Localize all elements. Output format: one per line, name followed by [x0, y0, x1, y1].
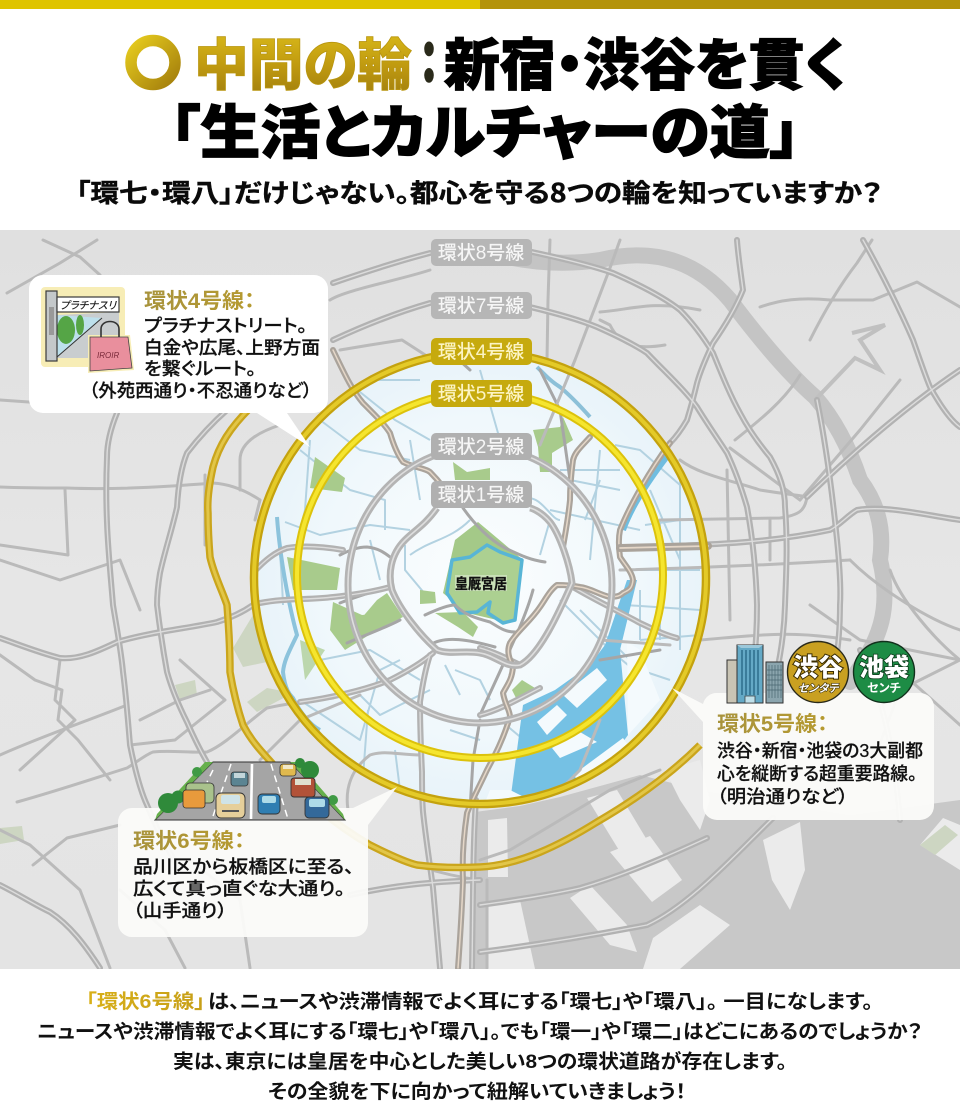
- description: [717, 741, 923, 807]
- title gold part: 中間の輪: [194, 21, 412, 102]
- label: ring 8: [431, 239, 532, 266]
- top colour bar: [0, 0, 960, 9]
- heading: 環状5号線：: [717, 713, 828, 736]
- outer faded parks: [0, 615, 958, 855]
- description: （外苑西通り・不忍通りなど）: [89, 381, 312, 401]
- bottom intro text: ニュースや渋滞情報でよく耳にする「環七」や「環八」。でも「環一」や「環二」はどこにあるのでしょうか？: [37, 1021, 922, 1043]
- car: blue: [258, 794, 280, 814]
- icon: Shibuya badge: 渋谷: [793, 654, 843, 682]
- label: ring 2: [431, 433, 532, 460]
- car: tan: [216, 793, 245, 818]
- icon: road with cars: [155, 758, 345, 820]
- white piers in bay: [486, 656, 660, 800]
- callout: ring 5: [672, 642, 934, 820]
- icon: Ikebukuro badge: センチ: [867, 681, 901, 695]
- label: imperial palace: 皇厩宮居: [455, 576, 507, 593]
- car: orange: [183, 783, 214, 808]
- icon: Ikebukuro badge: 池袋: [859, 654, 909, 682]
- title line one: 新宿・渋谷を貫く: [444, 21, 846, 102]
- water: gray river: [480, 250, 885, 682]
- car: gray teal: [231, 772, 248, 786]
- title line two: 「生活とカルチャーの道」: [170, 86, 800, 170]
- icon: platinum street sign and bag: IROIR: [97, 351, 119, 360]
- ring road 1: [390, 508, 572, 665]
- icon: platinum street sign and bag: [41, 287, 134, 373]
- description: 心を縦断する超重要路線。: [717, 764, 917, 784]
- label: ring 1: 環状1号線: [438, 484, 524, 506]
- callout 5 box and tail: [672, 688, 934, 820]
- icon: Shibuya badge: センタテ: [798, 682, 840, 695]
- bottom intro text: その全貌を下に向かって紐解いていきましょう！: [268, 1081, 686, 1103]
- subtitle: 「環七・環八」だけじゃない。都心を守る8つの輪を知っていますか？: [76, 173, 882, 210]
- car: gold: [280, 764, 296, 776]
- icon: office buildings: [727, 645, 783, 703]
- label: ring 8: 環状8号線: [438, 242, 524, 264]
- map panel: [0, 230, 960, 969]
- car: navy: [305, 797, 329, 818]
- label: ring 5: [431, 380, 532, 407]
- title colon: ：: [420, 19, 438, 100]
- heading: 環状4号線：: [144, 290, 255, 313]
- inner detail: [277, 350, 700, 830]
- central light blue zone: [254, 352, 706, 804]
- description: 品川区から板橋区に至る、: [133, 857, 354, 877]
- icon: gold ring: [131, 40, 175, 84]
- car: red: [291, 778, 315, 797]
- parks: [287, 417, 573, 700]
- icon: Shibuya badge: [788, 642, 848, 702]
- ring road 2: [348, 447, 612, 723]
- ring road 5 yellow: [297, 392, 663, 758]
- description: 白金や広尾、上野方面: [144, 338, 320, 358]
- palace moat: [447, 545, 522, 623]
- label: ring 7: [431, 292, 532, 319]
- ring road 6 gold: [208, 408, 700, 868]
- description: を繋ぐルート。: [144, 359, 256, 379]
- description: （山手通り）: [133, 901, 227, 921]
- icon: Ikebukuro badge: [854, 642, 914, 702]
- description: （明治通りなど）: [717, 787, 848, 807]
- water: gray bay: [470, 775, 960, 969]
- bottom intro text: 実は、東京には皇居を中心とした美しい8つの環状道路が存在します。: [173, 1050, 787, 1073]
- description: [133, 857, 354, 921]
- bottom intro text: は、ニュースや渋滞情報でよく耳にする「環七」や「環八」。 一目になします。: [208, 991, 873, 1013]
- beige arterial roads: [333, 350, 708, 968]
- callout 4 box and tail: [29, 275, 328, 447]
- label: ring 4: [431, 338, 532, 365]
- callout: ring 6: [118, 758, 397, 937]
- label: ring 1: [431, 481, 532, 508]
- inner gray roads: [340, 350, 660, 810]
- reclaimed land piers: [488, 782, 960, 969]
- description: プラチナストリート。: [144, 316, 307, 336]
- icon: imperial palace green: [443, 522, 523, 623]
- bottom intro text: [37, 991, 922, 1103]
- label: ring 2: 環状2号線: [438, 436, 524, 458]
- title: [131, 19, 846, 170]
- label: ring 5: 環状5号線: [438, 383, 524, 405]
- description: 渋谷・新宿・池袋の3大副都: [717, 741, 923, 761]
- heading: 環状6号線：: [133, 830, 245, 853]
- description: 広くて真っ直ぐな大通り。: [133, 879, 345, 899]
- blue waterways: [277, 370, 700, 790]
- outer roads: [0, 240, 960, 968]
- blue bay: [512, 580, 637, 796]
- icon: platinum street sign and bag: プラチナスリ: [60, 300, 118, 312]
- callout 6 box and tail: [118, 787, 397, 937]
- label: ring 7: 環状7号線: [438, 295, 524, 317]
- label: ring 4: 環状4号線: [438, 341, 524, 363]
- gold lead: 「環状6号線」: [86, 991, 205, 1013]
- ring road 4 gold: [254, 352, 706, 804]
- callout: ring 4: [29, 275, 328, 447]
- description: [89, 316, 320, 401]
